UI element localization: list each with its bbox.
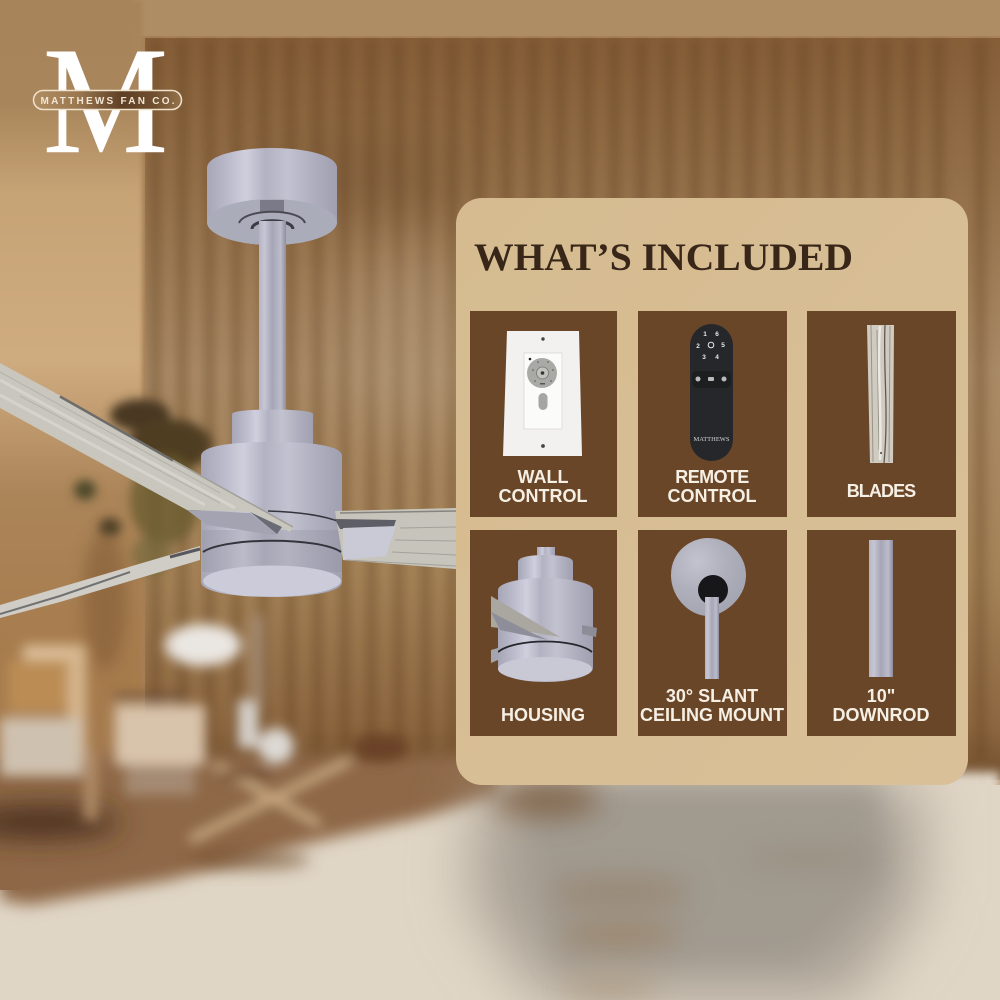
card: blades xyxy=(807,311,956,517)
label: 10" xyxy=(867,686,895,706)
icon: remote control: 6 xyxy=(715,331,719,338)
logo: Matthews Fan Co. xyxy=(34,17,182,186)
icon: remote control: 5 xyxy=(721,342,725,349)
label: HOUSING xyxy=(501,705,585,725)
label: DOWNROD xyxy=(832,705,930,725)
label: 30° SLANT xyxy=(666,686,758,706)
label: BLADES xyxy=(847,481,916,501)
label: CONTROL xyxy=(498,486,588,506)
card: ceiling mount xyxy=(638,530,787,736)
card: remote control xyxy=(638,311,787,517)
logo pill xyxy=(34,90,182,110)
floor shading xyxy=(0,755,500,905)
fan ceiling cap xyxy=(207,148,337,245)
blurred furniture xyxy=(0,615,408,840)
fan blade lower left xyxy=(0,546,200,618)
card: downrod xyxy=(807,530,956,736)
icon: wall control xyxy=(503,331,582,456)
icon: remote control xyxy=(690,324,733,461)
icon: remote control: 4 xyxy=(715,354,719,361)
icon: remote control: 3 xyxy=(702,354,706,361)
icon: remote control: 2 xyxy=(696,343,700,350)
icon: remote control: MATTHEWS xyxy=(694,436,730,443)
icon: blade xyxy=(867,325,894,463)
label: WALL xyxy=(518,467,568,487)
label: REMOTE xyxy=(675,467,749,487)
card: housing xyxy=(470,530,617,736)
fan blade upper left xyxy=(0,363,293,535)
ceiling fan xyxy=(0,148,456,618)
icon: housing xyxy=(491,547,597,682)
blurred plant xyxy=(74,399,212,575)
label: CONTROL xyxy=(668,486,756,506)
heading: WHAT’S INCLUDED xyxy=(474,236,853,279)
fan blade right xyxy=(335,508,456,569)
card: wall control xyxy=(470,311,617,517)
fan motor housing xyxy=(201,410,342,597)
logo monogram: M xyxy=(43,17,168,186)
logo wordmark: MATTHEWS FAN CO. xyxy=(40,96,175,107)
icon: remote control: 1 xyxy=(703,331,707,338)
panel: what's included xyxy=(456,198,968,785)
label: CEILING MOUNT xyxy=(640,705,784,725)
icon: ceiling mount xyxy=(671,538,746,679)
fan downrod xyxy=(259,221,286,413)
icon: downrod xyxy=(869,540,893,677)
